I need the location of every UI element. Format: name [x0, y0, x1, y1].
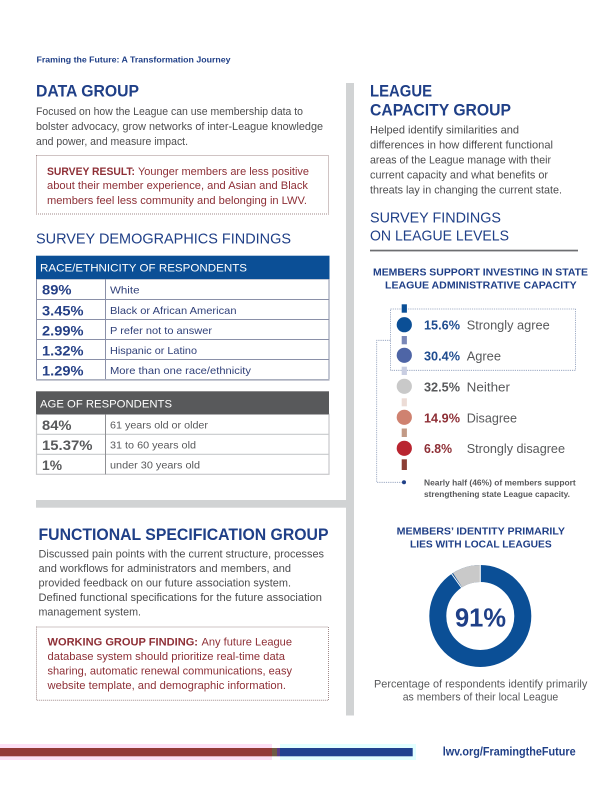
table: race/ethnicity of respondents: White [110, 284, 140, 296]
panel: data group [36, 82, 328, 214]
chart labels: 30.4% [424, 350, 460, 364]
text block: league capacity description [370, 124, 562, 196]
chart labels: 6.8% [424, 442, 452, 456]
page header: Framing the Future: A Transformation Journey [36, 54, 231, 64]
chart title [373, 267, 588, 291]
chart labels: 15.6% [424, 319, 460, 333]
note: nearly half support [424, 478, 576, 499]
callout: survey result: members feel less community and belonging in LWV. [47, 195, 307, 207]
text block: functional specification description [38, 549, 324, 618]
heading: survey findings on league levels [370, 210, 509, 245]
chart: likert scale timeline [397, 304, 412, 484]
table: race/ethnicity of respondents: 1.29% [42, 363, 84, 379]
text block: functional specification description: and workflows for administrators and members, and [38, 563, 291, 575]
callout: survey result: SURVEY RESULT: [47, 166, 135, 178]
chart labels: 32.5% [424, 381, 460, 395]
table: race/ethnicity of respondents: Hispanic or Latino [110, 345, 197, 357]
text block: league capacity description: threats lay in changing the current state. [370, 184, 562, 196]
heading: league capacity group: CAPACITY GROUP [370, 101, 511, 120]
callout: working group finding: WORKING GROUP FINDING: [48, 637, 198, 649]
callout: survey result: Younger members are less positive [138, 166, 309, 178]
chart: 91% donut: 91% [455, 603, 506, 633]
chart labels: 14.9% [424, 412, 460, 426]
table: age of respondents: 15.37% [42, 437, 93, 453]
table: race/ethnicity of respondents: More than one race/ethnicity [110, 365, 252, 377]
note: nearly half support: strengthening state League capacity. [424, 489, 570, 499]
chart labels: Agree [467, 348, 501, 364]
chart labels: Strongly disagree [467, 441, 565, 456]
panel: state league administrative capacity [373, 267, 588, 499]
dotted highlight box and bracket [377, 309, 576, 482]
heading: functional specification group: FUNCTIONAL SPECIFICATION GROUP [38, 526, 328, 544]
callout: survey result: about their member experience, and Asian and Black [47, 180, 309, 192]
table: race/ethnicity of respondents: 1.32% [42, 342, 84, 358]
heading: survey demographics findings: SURVEY DEMOGRAPHICS FINDINGS [36, 230, 291, 248]
chart title: LEAGUE ADMINISTRATIVE CAPACITY [385, 279, 577, 291]
text block: data group description: bolster advocacy, grow networks of inter-League knowledge [36, 121, 323, 133]
heading: data group: DATA GROUP [36, 82, 139, 100]
caption: Percentage of respondents identify primarily [374, 679, 588, 691]
panel: functional specification group [36, 526, 328, 700]
callout: working group finding: website template, and demographic information. [46, 680, 286, 692]
text block: data group description: Focused on how the League can use membership data to [36, 106, 303, 118]
heading: league capacity group [370, 82, 511, 120]
panel: members identity with local leagues [374, 525, 588, 704]
chart title [397, 525, 565, 551]
heading: survey findings on league levels: SURVEY FINDINGS [370, 210, 501, 227]
text block: league capacity description: current capacity and what benefits or [370, 169, 548, 181]
caption: as members of their local League [403, 692, 558, 704]
chart title: MEMBERS SUPPORT INVESTING IN STATE [373, 267, 588, 279]
table: race/ethnicity of respondents: 3.45% [42, 302, 84, 318]
caption [374, 679, 588, 704]
text block: league capacity description: Helped identify similarities and [370, 124, 519, 136]
table header [36, 256, 330, 279]
table: race/ethnicity of respondents: P refer not to answer [110, 325, 213, 337]
chart labels: Neither [467, 380, 511, 395]
table: race/ethnicity of respondents: Black or African American [110, 305, 237, 317]
table: race/ethnicity of respondents: 2.99% [42, 322, 84, 338]
chart: 91% donut [438, 564, 523, 658]
table: age of respondents: 31 to 60 years old [110, 440, 196, 451]
chart labels: Disagree [467, 411, 517, 426]
table: age of respondents: 61 years old or older [110, 420, 209, 431]
text block: data group description [36, 106, 323, 148]
text block: functional specification description: provided feedback on our future association system. [38, 578, 291, 590]
callout: working group finding: sharing, automatic renewal communications, easy [48, 666, 292, 678]
callout: survey result [36, 156, 328, 214]
panel: league capacity group [370, 82, 578, 251]
callout: working group finding: database system should prioritize real-time data [48, 651, 286, 663]
text block: data group description: and power, and measure impact. [36, 136, 188, 148]
heading: survey findings on league levels: ON LEAGUE LEVELS [370, 228, 509, 245]
table: race/ethnicity of respondents [36, 256, 330, 380]
table header: RACE/ETHNICITY OF RESPONDENTS [40, 263, 247, 275]
table header: AGE OF RESPONDENTS [40, 399, 172, 411]
table: age of respondents: 1% [42, 457, 63, 473]
table header [36, 391, 329, 414]
text block: league capacity description: differences in how different functional [370, 139, 553, 151]
chart labels: Strongly agree [467, 318, 550, 333]
text block: functional specification description: management system. [38, 606, 141, 618]
chart labels [424, 318, 565, 456]
callout: working group finding: Any future League [202, 637, 292, 649]
chart title: LIES WITH LOCAL LEAGUES [410, 539, 552, 551]
chart title: MEMBERS’ IDENTITY PRIMARILY [397, 525, 565, 537]
footer link: lwv.org/FramingtheFuture [443, 747, 576, 759]
table: race/ethnicity of respondents: 89% [42, 281, 72, 297]
text block: league capacity description: areas of the League manage with their [370, 154, 551, 166]
text block: functional specification description: Discussed pain points with the current structure, processes [38, 549, 324, 561]
table: age of respondents: under 30 years old [110, 460, 200, 471]
footer bar [0, 744, 416, 760]
text block: functional specification description: Defined functional specifications for the future association [38, 592, 322, 604]
heading: league capacity group: LEAGUE [370, 82, 432, 101]
table: age of respondents: 84% [42, 417, 72, 433]
note: nearly half support: Nearly half (46%) of members support [424, 478, 576, 488]
table: age of respondents [36, 391, 329, 474]
callout: working group finding [36, 627, 328, 700]
